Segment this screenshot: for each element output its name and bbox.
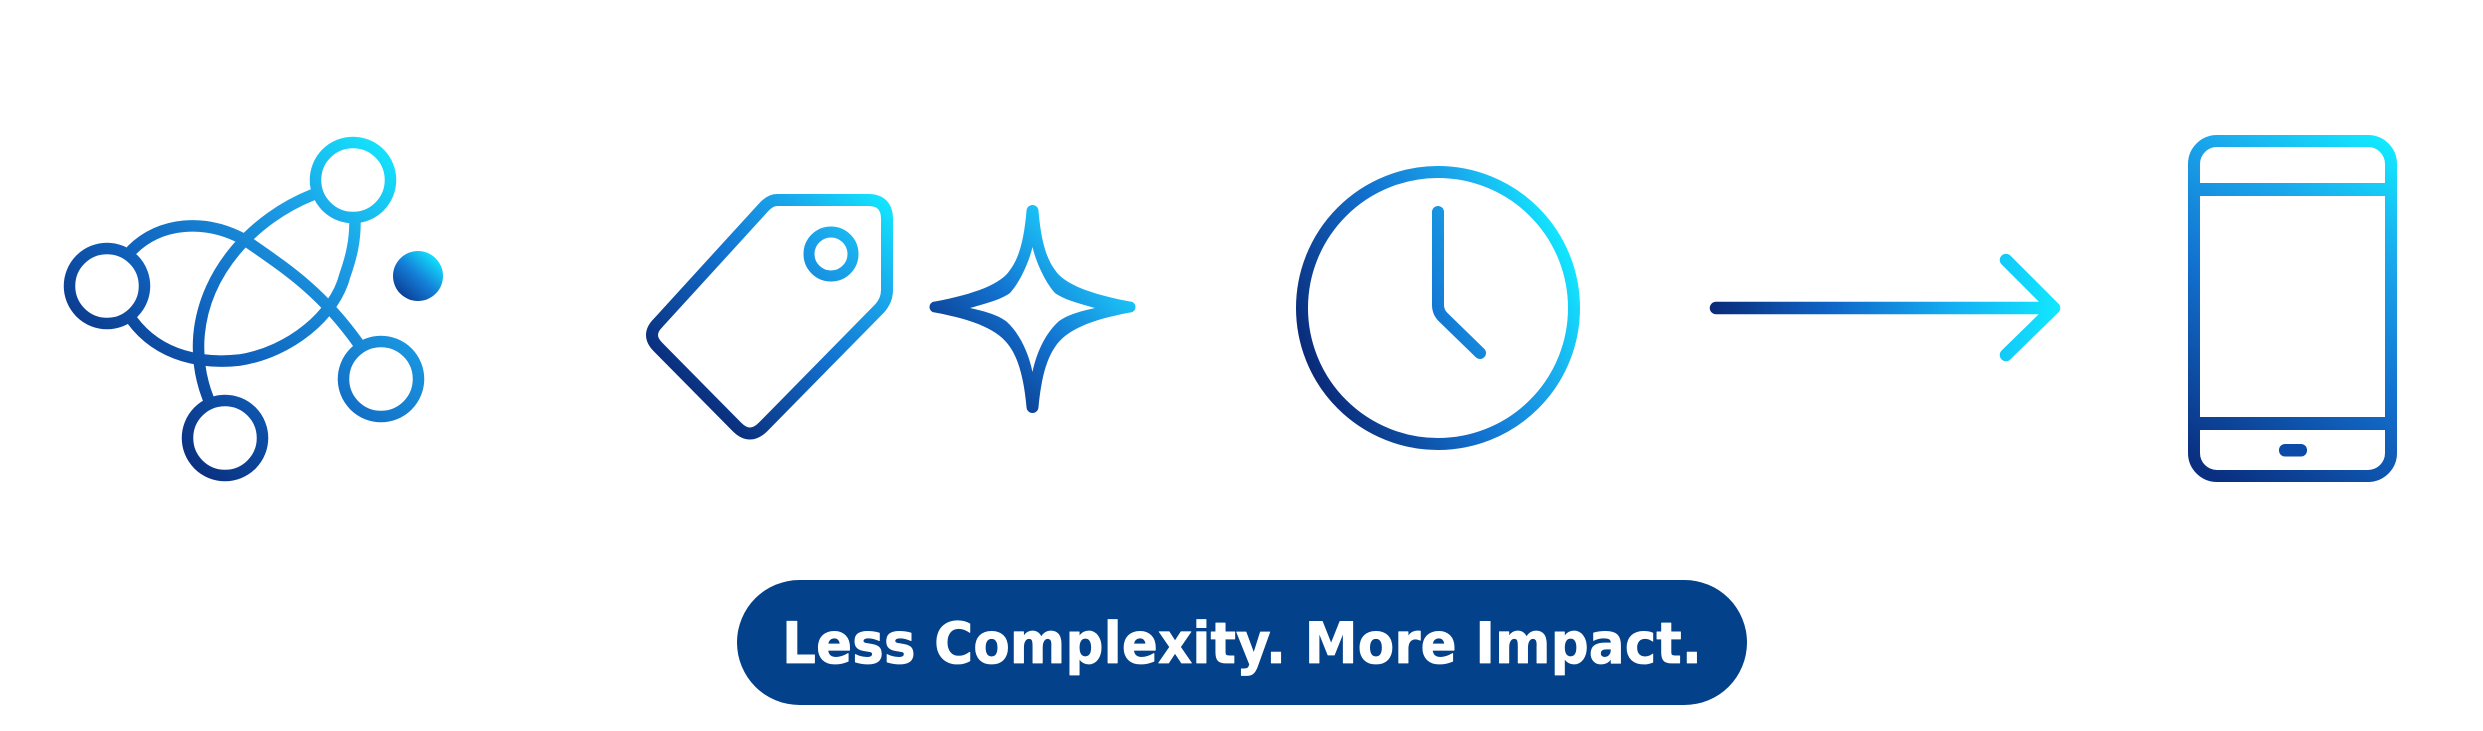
icon: network of connected nodes: [70, 142, 443, 476]
icon: clock: [1302, 172, 1574, 444]
icon: price tag: [652, 200, 887, 434]
arrow: [1716, 260, 2054, 355]
icon: solid gradient dot: [393, 251, 443, 301]
tagline text: Less Complexity. More Impact.: [782, 611, 1702, 677]
phone home button: [2279, 444, 2307, 456]
icon: smartphone: [2194, 141, 2391, 476]
tagline pill: [737, 580, 1747, 705]
icon: four-point sparkle star: [930, 205, 1136, 413]
